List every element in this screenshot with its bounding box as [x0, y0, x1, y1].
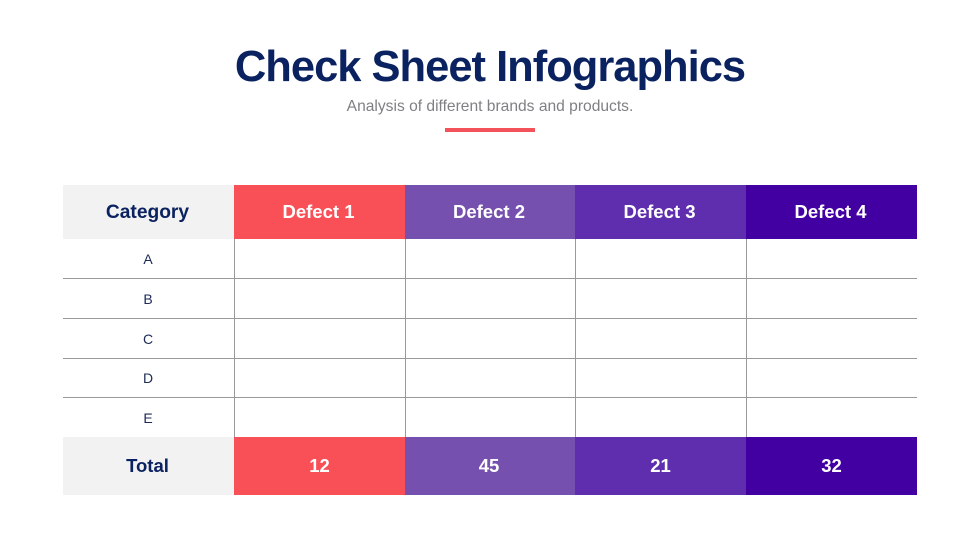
row label A: A [143, 251, 153, 267]
row label E: E [143, 410, 153, 426]
total label: Total [126, 455, 169, 476]
total defect 2 [405, 437, 575, 495]
total label [63, 437, 232, 495]
header: category [63, 185, 234, 239]
total defect 4: 32 [821, 455, 842, 476]
row label C: C [143, 331, 153, 347]
row label D: D [143, 370, 153, 386]
total defect 3: 21 [650, 455, 671, 476]
total defect 2: 45 [479, 455, 499, 476]
row label B: B [143, 291, 153, 307]
total defect 1 [234, 437, 405, 495]
header: category: Category [106, 202, 189, 222]
header: defect 3: Defect 3 [624, 201, 695, 222]
title: Check Sheet Infographics [235, 43, 745, 91]
header: defect 4 [746, 185, 917, 239]
total defect 4 [746, 437, 917, 495]
total defect 1: 12 [309, 455, 330, 476]
header: defect 3 [575, 185, 746, 239]
header: defect 1 [234, 185, 405, 239]
subtitle: Analysis of different brands and products. [347, 98, 633, 115]
header: defect 2: Defect 2 [453, 201, 525, 222]
accent underline [445, 128, 535, 132]
header: defect 2 [405, 185, 575, 239]
total defect 3 [575, 437, 746, 495]
header: defect 4: Defect 4 [794, 201, 866, 222]
header: defect 1: Defect 1 [282, 201, 354, 222]
